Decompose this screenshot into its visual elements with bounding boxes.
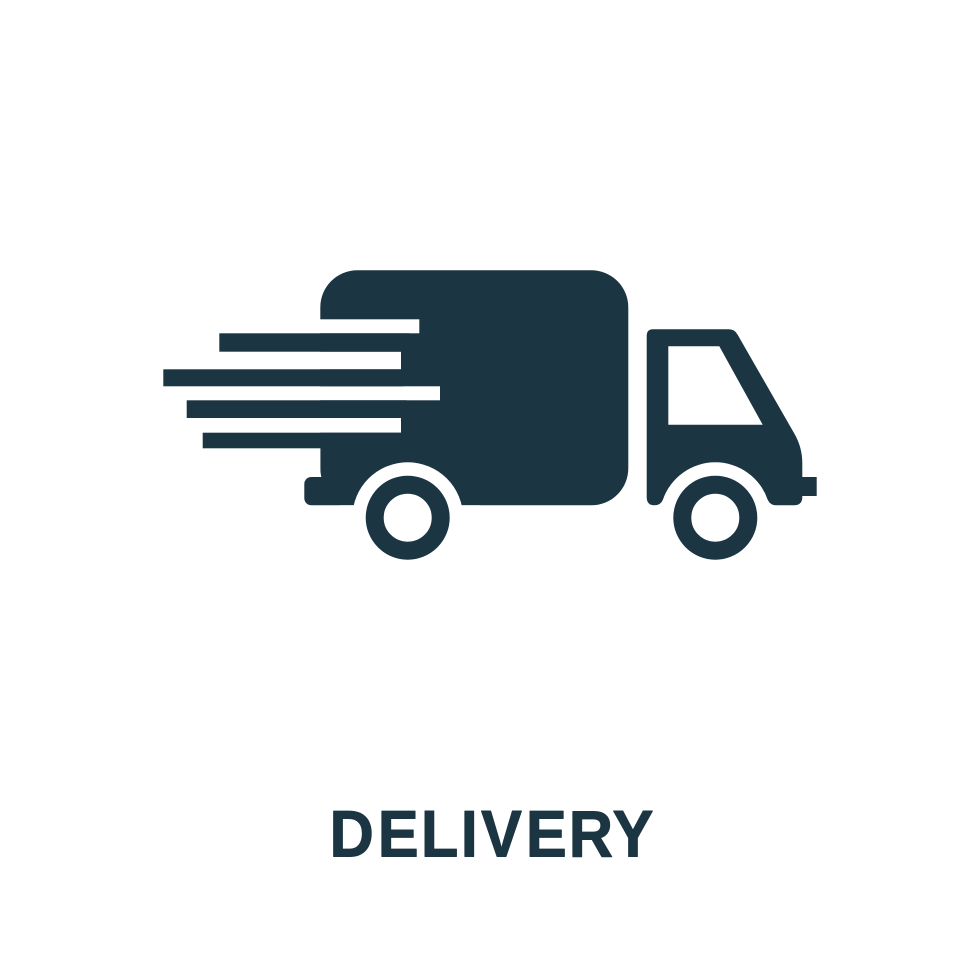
speed lines [163, 333, 409, 448]
truck cargo box [150, 270, 628, 505]
title: DELIVERY [329, 796, 653, 871]
icon: delivery truck [150, 270, 817, 580]
truck cab [647, 329, 817, 505]
rear wheel [375, 485, 441, 551]
rear wheel arch [352, 462, 463, 573]
cab window [668, 346, 763, 425]
front wheel [682, 485, 748, 551]
